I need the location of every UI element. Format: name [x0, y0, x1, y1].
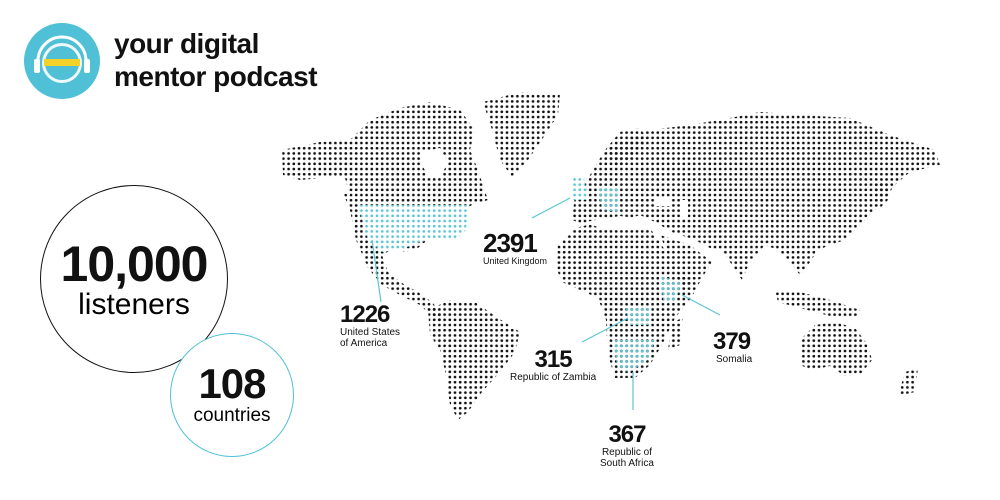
title: [114, 28, 318, 92]
africa: [555, 222, 700, 378]
label: south africa: 367: [608, 421, 645, 448]
label: uk: United Kingdom: [483, 256, 547, 266]
stat: listeners: listeners: [78, 288, 190, 321]
label: somalia: [713, 328, 752, 365]
stat: countries: [170, 333, 294, 457]
stat: countries: 108: [198, 360, 266, 407]
japan: [875, 178, 890, 210]
label: south africa: South Africa: [600, 458, 654, 469]
label: somalia: 379: [713, 328, 750, 355]
label: uk: 2391: [483, 228, 537, 258]
label: usa: 1226: [340, 301, 389, 328]
stat: listeners: [40, 185, 228, 373]
arabia: [660, 235, 712, 288]
south america: [428, 300, 520, 420]
label: usa: [340, 301, 400, 349]
label: usa: United States: [340, 327, 400, 338]
label: zambia: 315: [535, 346, 572, 373]
europe and asia: [572, 112, 940, 280]
stat: listeners: 10,000: [61, 236, 207, 292]
scandinavia: [605, 128, 648, 168]
label: usa: of America: [340, 338, 387, 349]
new zealand: [898, 368, 918, 396]
north america: [282, 102, 488, 322]
title: mentor podcast: [114, 61, 317, 92]
label: zambia: [510, 346, 596, 383]
madagascar: [668, 318, 683, 350]
label: south africa: Republic of: [602, 447, 652, 458]
label: uk: [483, 228, 547, 266]
australia: [800, 322, 872, 376]
greenland: [483, 92, 560, 177]
title: your digital: [114, 28, 259, 59]
stat: countries: countries: [193, 405, 271, 426]
label: south africa: [600, 421, 654, 469]
logo: [24, 23, 100, 99]
label: somalia: Somalia: [716, 354, 752, 365]
label: zambia: Republic of Zambia: [510, 372, 596, 383]
indonesia: [775, 290, 860, 318]
